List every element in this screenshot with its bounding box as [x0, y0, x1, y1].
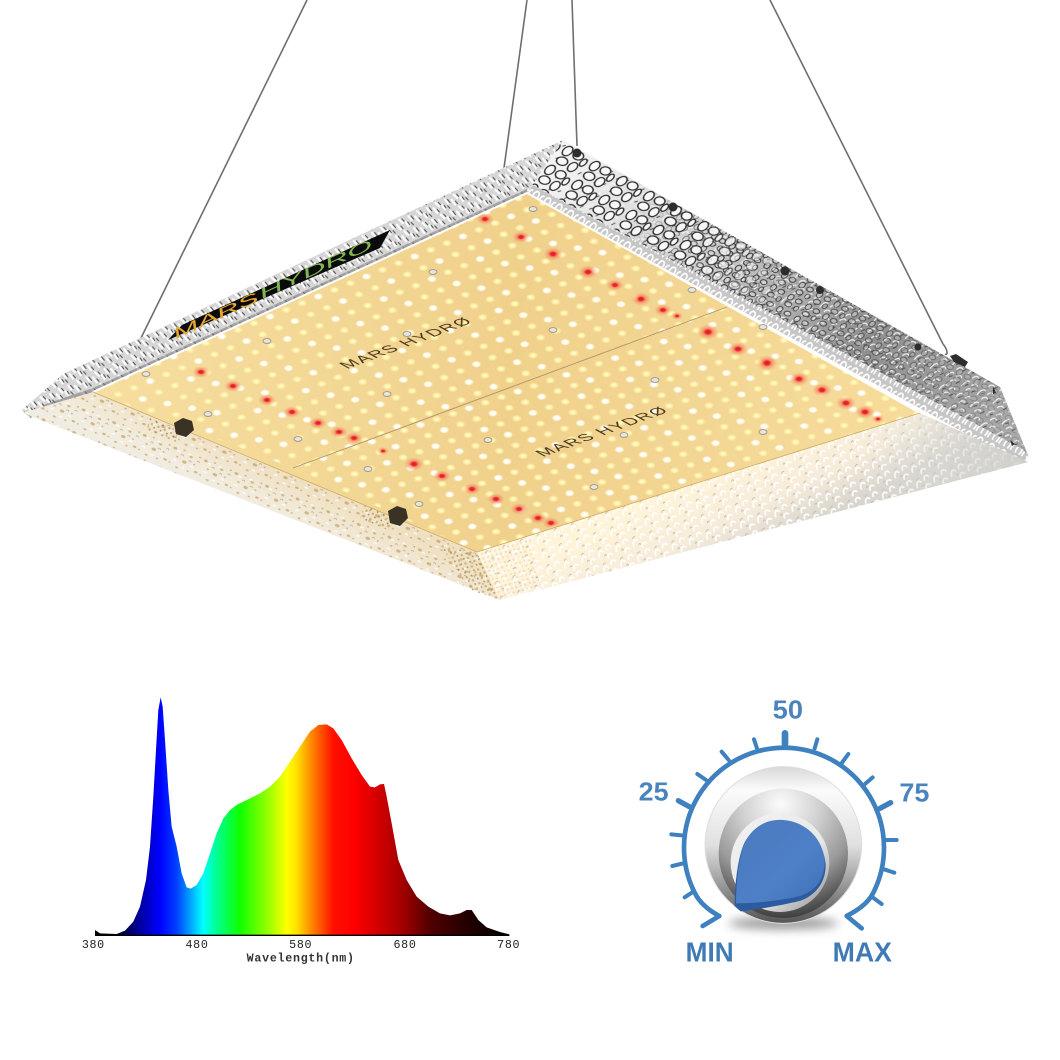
black brand label	[168, 230, 390, 342]
scale value labels: 50	[773, 696, 803, 724]
left rear rim	[22, 140, 563, 418]
spectrum curve	[95, 697, 509, 936]
outer knob disc	[705, 767, 862, 923]
minimum label: MIN	[686, 937, 734, 968]
scale value labels: 25	[639, 779, 669, 807]
red LEDs	[192, 213, 884, 529]
knob shadow	[728, 917, 838, 929]
middle knob disc	[719, 789, 848, 918]
thumb bolt left	[174, 418, 194, 437]
front right reflector	[477, 413, 1028, 600]
thumb bolt right	[388, 506, 408, 526]
axis tick labels: 580	[289, 938, 312, 952]
front left reflector	[22, 392, 500, 600]
board logo lower: MARS HYDRØ	[531, 405, 672, 459]
spectrum chart	[82, 698, 520, 965]
scale value labels	[639, 696, 929, 808]
board logo upper: MARS HYDRØ	[335, 316, 476, 371]
blue pointer top	[736, 820, 825, 903]
black brand label: HYDRO	[256, 238, 376, 302]
axis tick labels	[82, 938, 520, 952]
axis tick labels: 680	[394, 938, 416, 952]
rim bolts and hanging bracket	[572, 148, 1015, 446]
axis tick labels: 480	[186, 938, 208, 952]
grow light panel	[22, 0, 1028, 600]
black brand label: MARS	[170, 290, 263, 342]
blue pointer underside	[735, 821, 826, 911]
dimmer dial	[639, 696, 929, 968]
inner knob ring	[731, 813, 829, 912]
axis baseline	[95, 933, 509, 937]
scale value labels: 75	[899, 780, 929, 808]
axis tick labels: 380	[82, 938, 105, 952]
suspension wires	[141, 0, 947, 354]
right rear rim with hammered texture	[527, 140, 1028, 463]
axis title: Wavelength(nm)	[247, 951, 354, 965]
LED board	[93, 193, 920, 552]
scale ring	[671, 733, 897, 928]
sensors on LED board	[142, 207, 767, 506]
maximum label: MAX	[833, 937, 892, 968]
axis tick labels: 780	[497, 938, 520, 952]
